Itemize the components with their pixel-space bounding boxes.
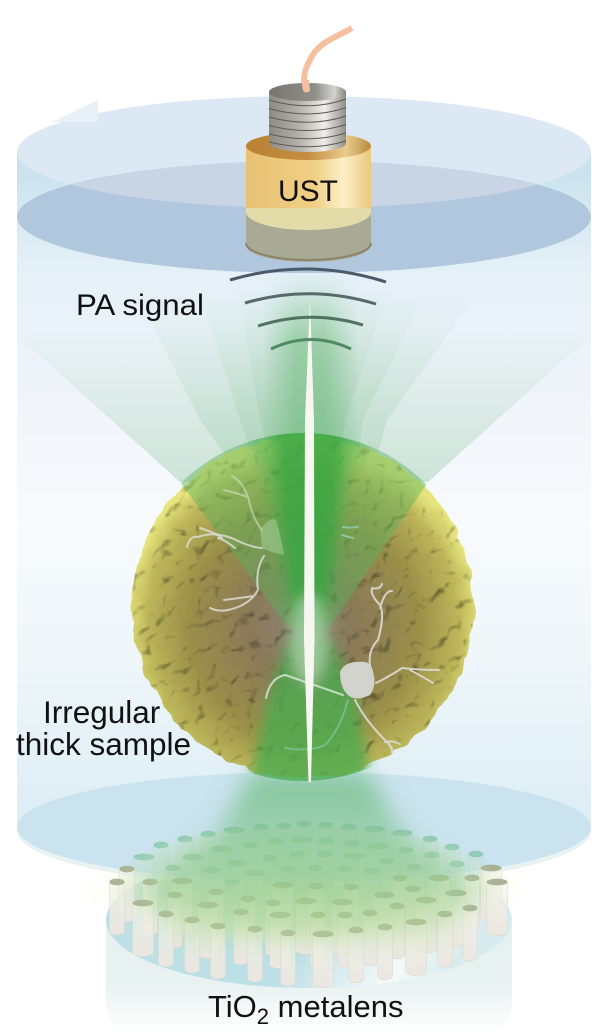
top ellipse: [17, 96, 591, 208]
coil: [269, 92, 346, 152]
TiO2 metalens label: 2: [257, 1004, 269, 1029]
green tint across pillars: [106, 825, 506, 965]
soma right: [340, 662, 374, 698]
PA signal label: PA signal: [76, 289, 204, 322]
TiO2 metalens label: TiO: [208, 989, 257, 1024]
PA signal wavefronts: [230, 269, 386, 349]
cylinder body: [17, 152, 591, 827]
neurons: [187, 476, 439, 752]
Irregular thick sample label: thick sample: [16, 726, 191, 762]
green light inside sphere: [180, 420, 428, 795]
second ellipse: [17, 161, 591, 273]
Irregular thick sample label: Irregular: [43, 694, 160, 730]
housing: [246, 146, 371, 208]
yellow glow around pillars: [80, 835, 530, 945]
UST transducer: [246, 28, 371, 262]
metalens pillar array: [110, 821, 508, 988]
sphere sample with cell texture: [132, 420, 474, 795]
bottom ellipse: [17, 772, 591, 887]
UST label: UST: [278, 175, 338, 208]
soma left: [260, 519, 284, 555]
green ultrasound fans: [46, 280, 562, 482]
notch arrow on top rim: [52, 100, 98, 122]
lower focused light cone: [140, 772, 480, 945]
lens substrate: [106, 852, 512, 1034]
cable: [304, 28, 352, 91]
TiO2 metalens label: metalens: [269, 989, 403, 1024]
central bright slit: [304, 298, 314, 782]
